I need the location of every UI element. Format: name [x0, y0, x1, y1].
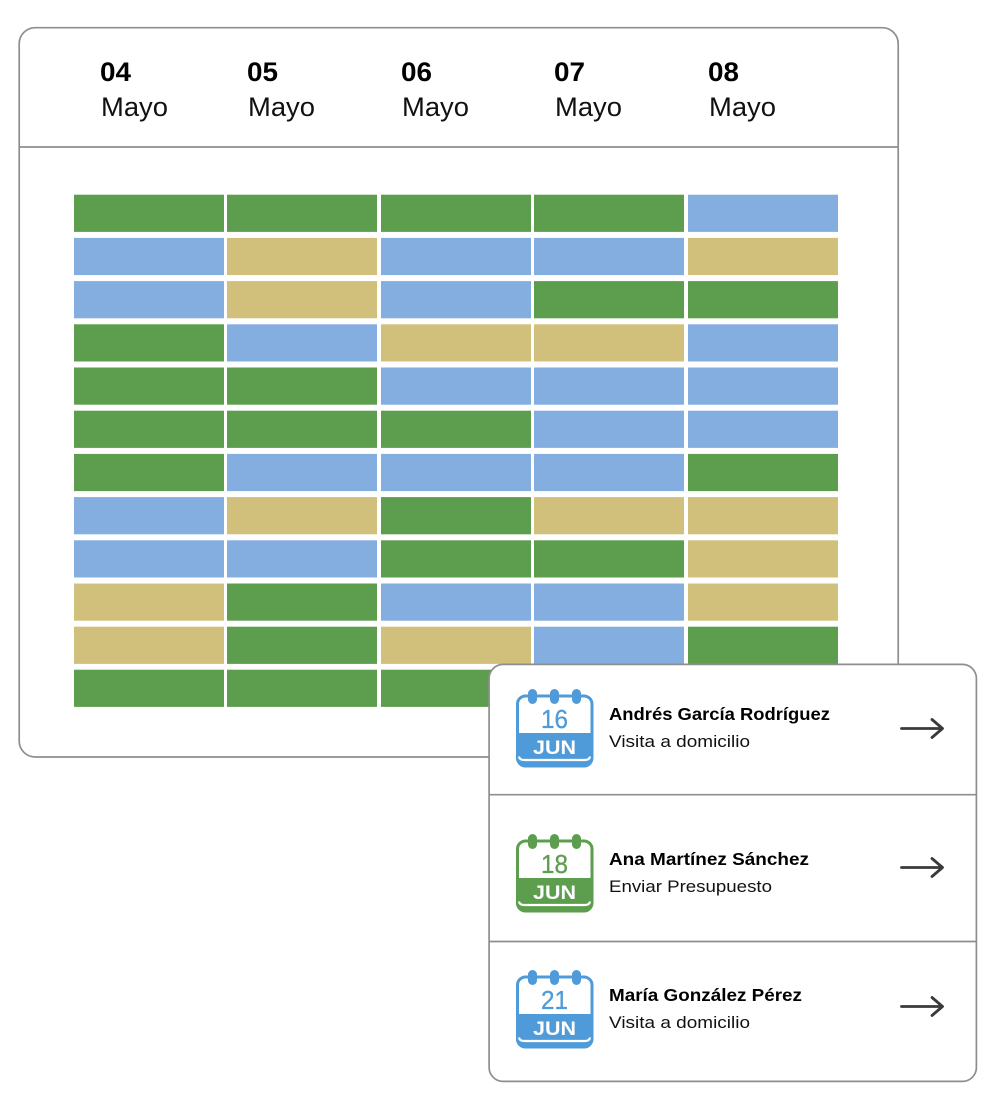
date: 08 Mayo [708, 57, 776, 122]
date: 06 Mayo: Mayo [402, 92, 469, 122]
date: 05 Mayo: 05 [247, 57, 278, 87]
panel: appointments list [489, 664, 976, 1081]
icon: calendar 21 JUN: 21 [541, 985, 568, 1015]
date: 04 Mayo: Mayo [101, 92, 168, 122]
icon: calendar 18 JUN [516, 834, 593, 912]
appointment: Andrés García Rodríguez [516, 689, 942, 767]
date: 06 Mayo: 06 [401, 57, 432, 87]
appointment: María González Pérez [516, 970, 942, 1048]
date header row [100, 57, 776, 122]
arrow [902, 998, 942, 1016]
arrow [902, 720, 942, 738]
date: 04 Mayo [100, 57, 168, 122]
task: Visita a domicilio [609, 1013, 750, 1032]
icon: calendar 18 JUN: JUN [533, 883, 576, 904]
arrow [902, 858, 942, 876]
task: Visita a domicilio [609, 732, 750, 751]
schedule grid [74, 195, 838, 707]
date: 07 Mayo [554, 57, 622, 122]
date: 07 Mayo: Mayo [555, 92, 622, 122]
date: 04 Mayo: 04 [100, 57, 131, 87]
icon: calendar 18 JUN: 18 [541, 849, 568, 879]
date: 06 Mayo [401, 57, 469, 122]
name: Ana Martínez Sánchez [609, 849, 809, 869]
date: 08 Mayo: Mayo [709, 92, 776, 122]
appointment: Ana Martínez Sánchez [516, 834, 942, 912]
icon: calendar 16 JUN: 16 [541, 704, 568, 734]
icon: calendar 16 JUN [516, 689, 593, 767]
date: 07 Mayo: 07 [554, 57, 585, 87]
name: María González Pérez [609, 985, 802, 1005]
name: Andrés García Rodríguez [609, 704, 830, 724]
icon: calendar 21 JUN [516, 970, 593, 1048]
date: 08 Mayo: 08 [708, 57, 739, 87]
icon: calendar 21 JUN: JUN [533, 1019, 576, 1040]
date: 05 Mayo: Mayo [248, 92, 315, 122]
panel: calendar schedule [19, 28, 898, 757]
date: 05 Mayo [247, 57, 315, 122]
task: Enviar Presupuesto [609, 877, 772, 896]
icon: calendar 16 JUN: JUN [533, 738, 576, 759]
